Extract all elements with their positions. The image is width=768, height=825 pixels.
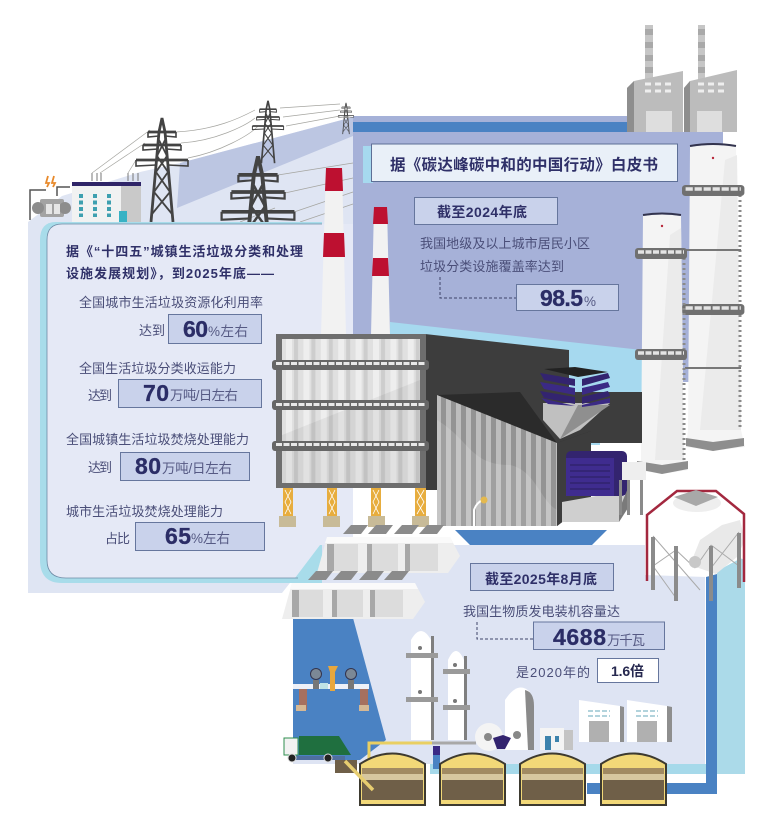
callout: 2024 coverage: 我国地级及以上城市居民小区 bbox=[420, 236, 590, 251]
stat: incineration capacity 80: 全国城镇生活垃圾焚烧处理能力 bbox=[66, 432, 249, 447]
exhaust duct with purple vents bbox=[540, 367, 610, 439]
boiler support legs bbox=[279, 488, 429, 527]
purple engine on base bbox=[562, 451, 646, 522]
icon: silo frame bbox=[647, 490, 744, 601]
corrugated hall bbox=[437, 392, 591, 526]
stat: resource utilisation 60%: 60 bbox=[183, 316, 208, 342]
heading: left panel: 设施发展规划》，到2025年底—— bbox=[66, 266, 274, 281]
icon: white sheds bbox=[579, 700, 672, 742]
callout: 2025 biomass capacity: 我国生物质发电装机容量达 bbox=[463, 604, 620, 619]
stat: sorting capacity 70: 70 bbox=[143, 380, 169, 406]
icon: digester tanks bbox=[360, 754, 666, 805]
stat: resource utilisation 60%: %左右 bbox=[208, 324, 248, 339]
icon: substation building bbox=[72, 173, 141, 223]
background panel: power line slope bbox=[28, 117, 353, 593]
icon: valves bbox=[296, 666, 369, 711]
icon: pylon mid bbox=[252, 101, 284, 163]
callout: 2024 coverage: 截至2024年底 bbox=[437, 204, 527, 220]
callout: 2025 biomass capacity: 4688 bbox=[553, 624, 606, 650]
callout: 2025 biomass capacity bbox=[463, 564, 664, 682]
icon: large exhaust tower bbox=[682, 144, 745, 451]
stat: sorting capacity 70: 达到 bbox=[88, 388, 112, 403]
panel: white paper callout title: 据《碳达峰碳中和的中国行动》白皮书 bbox=[390, 156, 658, 174]
icon: transformer bbox=[30, 176, 71, 220]
stat: incineration share 65% bbox=[66, 504, 264, 550]
panel: white paper background bbox=[353, 116, 723, 545]
icon: yellow pipes bbox=[369, 743, 476, 769]
callout: 2025 biomass capacity: 截至2025年8月底 bbox=[485, 571, 597, 587]
icon: second exhaust tower bbox=[635, 214, 688, 474]
stat: incineration capacity 80: 达到 bbox=[88, 460, 112, 475]
stat: incineration share 65%: 城市生活垃圾焚烧处理能力 bbox=[66, 504, 223, 519]
icon: pylon large bbox=[136, 118, 188, 222]
panel: bottom biomass background bbox=[293, 440, 745, 794]
heading: left panel bbox=[66, 244, 303, 281]
stat: incineration share 65%: %左右 bbox=[191, 531, 230, 546]
stat: resource utilisation 60%: 达到 bbox=[139, 323, 165, 338]
icon: pylon front bbox=[222, 156, 294, 294]
icon: storage tank and pump bbox=[475, 688, 534, 751]
stat: sorting capacity 70: 全国生活垃圾分类收运能力 bbox=[79, 361, 236, 376]
stat: incineration capacity 80: 万吨/日左右 bbox=[162, 461, 232, 476]
icon: feed hopper and chute bbox=[335, 760, 373, 790]
stat: resource utilisation 60%: 全国城市生活垃圾资源化利用率 bbox=[79, 295, 263, 310]
stat: incineration capacity 80 bbox=[66, 432, 250, 480]
heading: left panel: 据《“十四五”城镇生活垃圾分类和处理 bbox=[66, 244, 303, 259]
callout: 2025 biomass capacity: 1.6倍 bbox=[611, 663, 644, 679]
icon: blue water strip bbox=[455, 530, 607, 545]
stat: sorting capacity 70 bbox=[79, 361, 262, 408]
power lines bbox=[92, 104, 353, 222]
callout: 2025 biomass capacity: 万千瓦 bbox=[607, 633, 645, 648]
callout: 2024 coverage: 98.5 bbox=[540, 285, 583, 311]
icon: distant grey factories bbox=[627, 25, 737, 132]
icon: process columns bbox=[406, 631, 470, 740]
boiler body bbox=[272, 334, 429, 488]
callout: 2024 coverage: 垃圾分类设施覆盖率达到 bbox=[420, 259, 564, 274]
stat: resource utilisation 60% bbox=[79, 295, 263, 344]
icon: concrete blocks bbox=[282, 525, 460, 619]
stat: incineration capacity 80: 80 bbox=[135, 453, 161, 479]
icon: red white chimneys bbox=[321, 168, 390, 335]
icon: garbage truck bbox=[284, 736, 351, 762]
panel: white paper callout title bbox=[363, 144, 678, 183]
panel: blue valve area bbox=[293, 618, 386, 760]
callout: 2025 biomass capacity: 是2020年的 bbox=[516, 665, 590, 680]
stat: incineration share 65%: 占比 bbox=[105, 531, 130, 546]
icon: pylon small bbox=[338, 103, 354, 134]
icon: small pump house bbox=[540, 728, 573, 750]
callout: 2024 coverage: % bbox=[584, 294, 596, 309]
icon: incineration plant bbox=[272, 334, 646, 527]
stat: incineration share 65%: 65 bbox=[165, 523, 191, 549]
callout: 2024 coverage bbox=[414, 198, 618, 311]
stat: sorting capacity 70: 万吨/日左右 bbox=[170, 388, 238, 403]
panel: 十四五 targets bbox=[40, 222, 353, 583]
